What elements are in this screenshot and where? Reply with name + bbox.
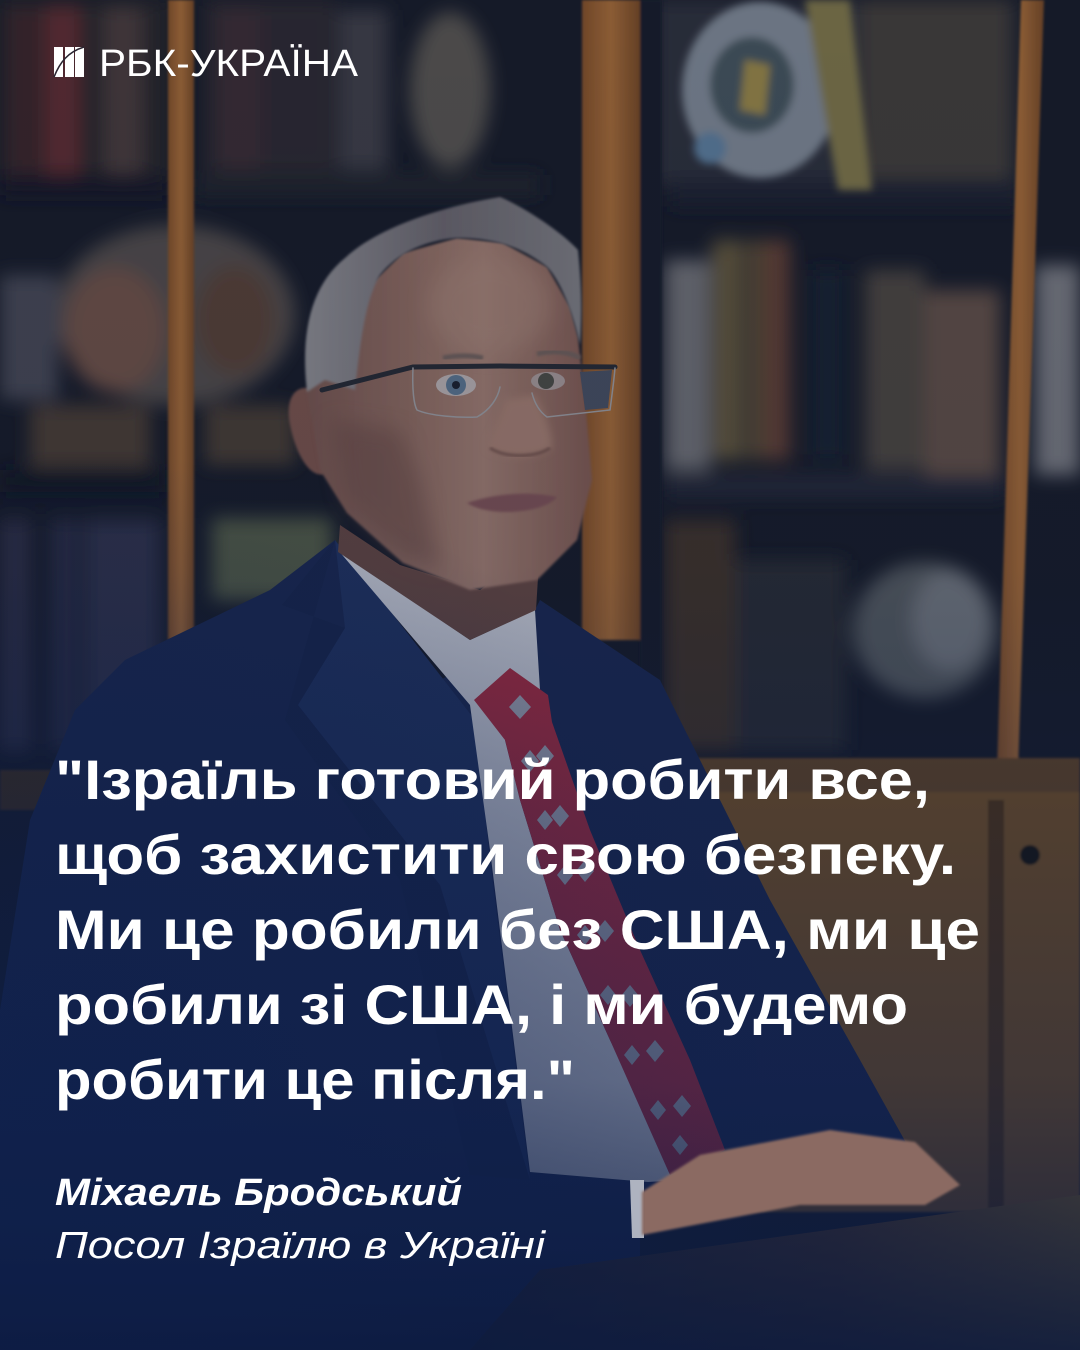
- attribution: Міхаель Бродський: [55, 1172, 462, 1214]
- quote: Ми це робили без США, ми це: [55, 898, 980, 961]
- nose: [487, 395, 552, 456]
- eyebrows: [443, 352, 580, 358]
- mouth: [467, 494, 557, 512]
- ear: [289, 388, 340, 474]
- portrait: ambassador in suit and glasses: [0, 197, 910, 1350]
- necktie: [474, 668, 725, 1175]
- hands and shirt cuff: [630, 1130, 960, 1238]
- hair: [305, 197, 581, 392]
- face: [307, 238, 592, 590]
- neck: [338, 525, 540, 640]
- logo wordmark: РБК-УКРАЇНА: [99, 43, 359, 85]
- glasses: [322, 366, 615, 417]
- cheek shadow: [330, 420, 440, 570]
- jacket: [0, 540, 910, 1350]
- left lapel: [282, 540, 530, 1180]
- attribution: Посол Ізраїлю в Україні: [55, 1225, 547, 1267]
- forehead highlight: [428, 257, 552, 353]
- quote: "Ізраїль готовий робити все,: [55, 748, 930, 811]
- quote: [55, 748, 980, 1111]
- lens reflection: [580, 370, 612, 410]
- shirt: [338, 550, 680, 1182]
- quote: щоб захистити свою безпеку.: [55, 823, 956, 886]
- icon: logo mark: [54, 47, 84, 77]
- logo: РБК-Україна: [54, 43, 359, 85]
- quote: робили зі США, і ми будемо: [55, 973, 908, 1036]
- attribution: [55, 1172, 547, 1267]
- desk foreground: [470, 1195, 1080, 1350]
- quote: робити це після.": [55, 1048, 575, 1111]
- eyes: [436, 374, 476, 396]
